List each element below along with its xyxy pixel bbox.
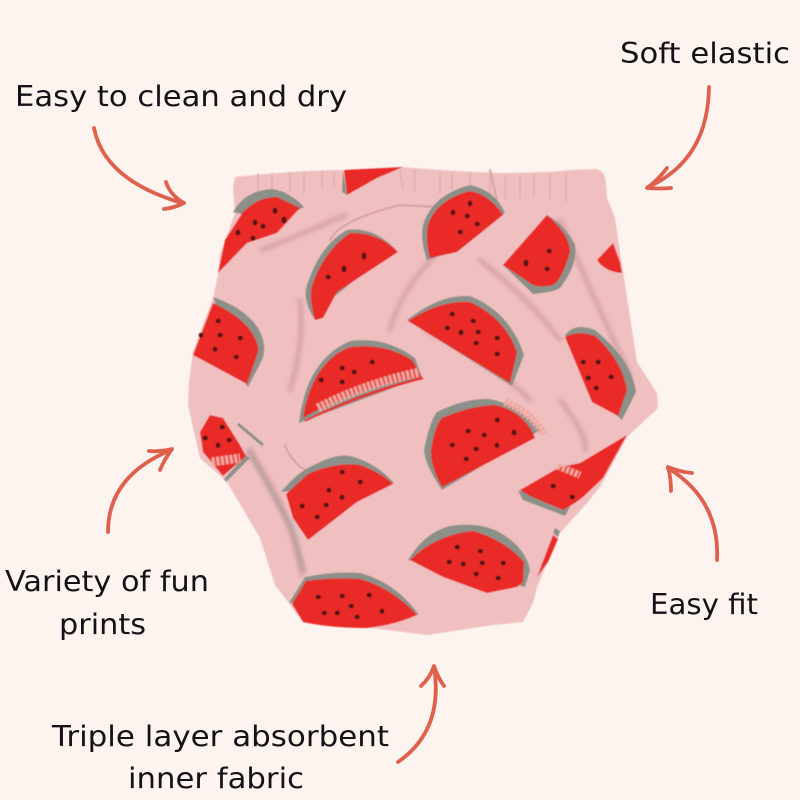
slice at waist centre — [342, 167, 403, 195]
waistband ribbing — [258, 170, 566, 202]
product photo: watermelon print training pants — [188, 167, 658, 635]
arrow: triple layer absorbent — [398, 666, 444, 762]
slice top right — [503, 215, 575, 294]
arrow: soft elastic — [647, 87, 709, 188]
garment body — [188, 167, 658, 635]
slice bottom — [289, 572, 419, 628]
slice right middle — [565, 327, 636, 420]
label: triple layer absorbent inner fabric: inner fabric — [128, 762, 304, 795]
arrow: easy fit — [668, 467, 717, 560]
slice centre right lower — [424, 399, 544, 490]
slice left middle — [193, 297, 264, 387]
label: variety of fun prints: Variety of fun — [5, 565, 209, 598]
label: variety of fun prints — [5, 565, 209, 641]
slice lower centre — [408, 525, 530, 593]
label: triple layer absorbent inner fabric: Triple layer absorbent — [51, 720, 389, 753]
fabric folds — [248, 170, 630, 575]
slice upper centre left — [306, 229, 398, 320]
slice centre — [407, 296, 524, 386]
slice left lower edge — [200, 415, 263, 482]
slice centre left with stitching — [299, 340, 424, 423]
label: variety of fun prints: prints — [59, 608, 146, 641]
label: soft elastic: Soft elastic — [620, 37, 790, 70]
slice top left — [218, 189, 304, 273]
label: easy to clean and dry: Easy to clean and dry — [15, 80, 347, 113]
arrow: easy to clean and dry — [94, 128, 184, 209]
slice far top right — [597, 243, 622, 273]
slice top centre — [422, 185, 505, 260]
slice edge lower right — [537, 528, 560, 577]
slice right lower edge — [518, 435, 627, 516]
slice lower left — [281, 456, 394, 540]
arrow: variety of fun prints — [108, 449, 172, 532]
label: easy fit: Easy fit — [650, 588, 758, 621]
label: triple layer absorbent inner fabric — [51, 720, 389, 795]
